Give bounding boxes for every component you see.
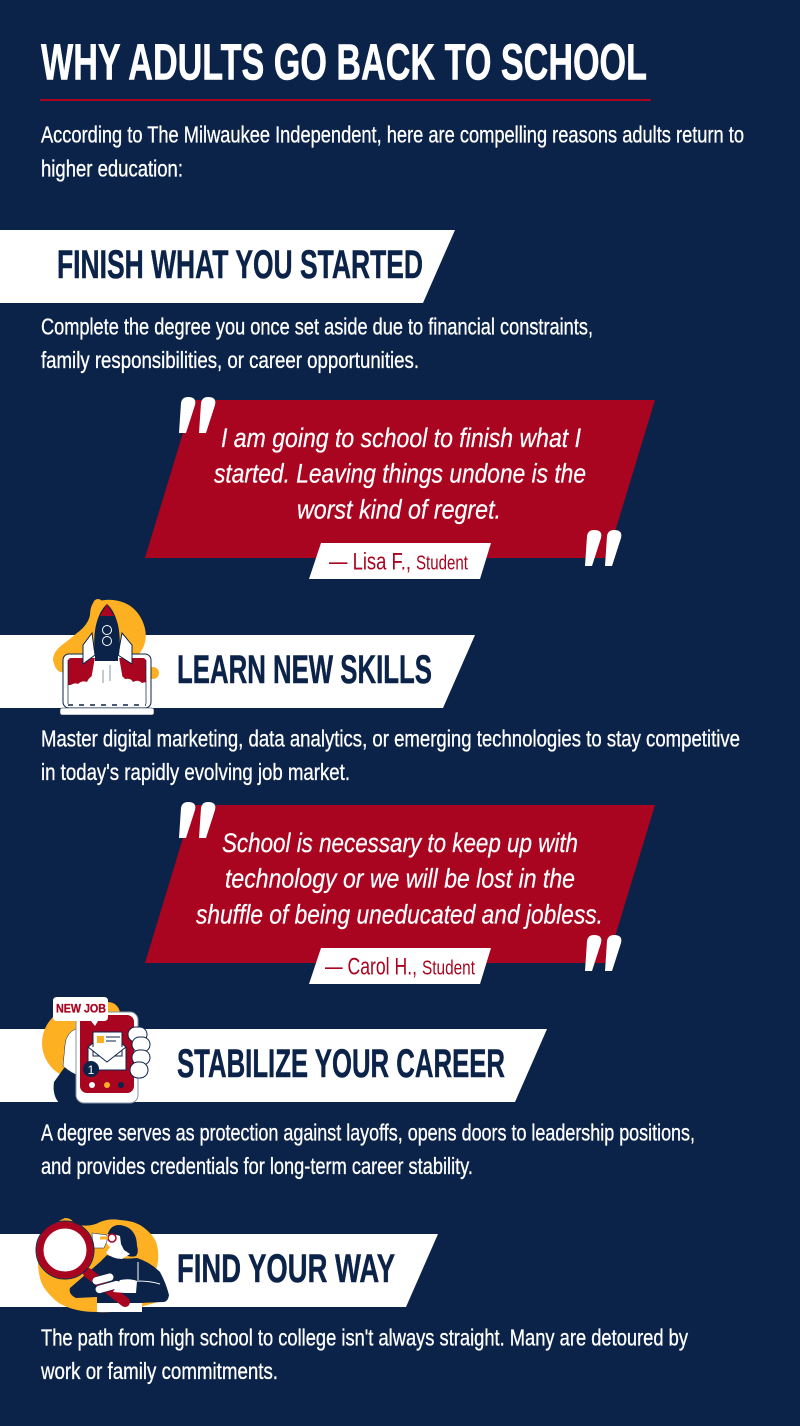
quote: Carol H.: Student xyxy=(422,958,475,980)
quote: Lisa F.: I am going to school to finish what I xyxy=(221,423,581,453)
body text: stabilize xyxy=(41,1120,695,1179)
body text: finish xyxy=(41,314,593,373)
panel: find your way xyxy=(0,1218,688,1384)
quote: Lisa F.: Student xyxy=(416,552,468,574)
quote: Carol H.: School is necessary to keep up with xyxy=(222,828,578,858)
banner: find your way: FIND YOUR WAY xyxy=(177,1247,395,1291)
panel: finish what you started xyxy=(0,230,655,579)
banner: finish what you started: FINISH WHAT YOU STARTED xyxy=(57,243,423,287)
panel: learn new skills xyxy=(0,599,740,984)
banner: stabilize your career xyxy=(0,1029,547,1102)
body text: finish: family responsibilities, or career opportunities. xyxy=(41,347,419,373)
banner: learn new skills xyxy=(0,635,475,708)
body text: learn xyxy=(41,726,740,785)
banner: stabilize your career: STABILIZE YOUR CAREER xyxy=(177,1042,505,1086)
panel: stabilize your career xyxy=(0,997,695,1179)
quote: Lisa F.: — Lisa F., xyxy=(329,548,411,576)
quote: Lisa F.: started. Leaving things undone is the xyxy=(214,458,586,488)
quote: Lisa F. xyxy=(145,397,655,579)
body text: finish: Complete the degree you once set aside due to financial constraints, xyxy=(41,314,593,340)
banner: learn new skills: LEARN NEW SKILLS xyxy=(177,648,432,692)
body text: find xyxy=(40,1324,688,1384)
quote: Lisa F.: worst kind of regret. xyxy=(297,494,501,524)
quote: Carol H.: — Carol H., xyxy=(325,954,417,980)
body text: find: work or family commitments. xyxy=(40,1358,278,1384)
banner: finish what you started xyxy=(0,230,455,303)
quote: Carol H.: technology or we will be lost in the xyxy=(225,864,575,894)
icon: woman with magnifying glass xyxy=(36,1218,169,1312)
intro text xyxy=(41,122,744,182)
intro text: higher education: xyxy=(41,156,183,182)
quote: Carol H.: shuffle of being uneducated and jobless. xyxy=(196,900,603,930)
icon: rocket launching from laptop xyxy=(53,599,159,715)
icon: phone with new job message: NEW JOB xyxy=(56,1002,106,1016)
icon: phone with new job message xyxy=(42,997,150,1113)
body text: stabilize: and provides credentials for long-term career stability. xyxy=(41,1153,473,1179)
quote: Carol H. xyxy=(145,802,655,984)
body text: learn: in today's rapidly evolving job market. xyxy=(41,759,350,785)
icon: phone with new job message: 1 xyxy=(88,1063,95,1077)
banner: find your way xyxy=(0,1234,438,1307)
